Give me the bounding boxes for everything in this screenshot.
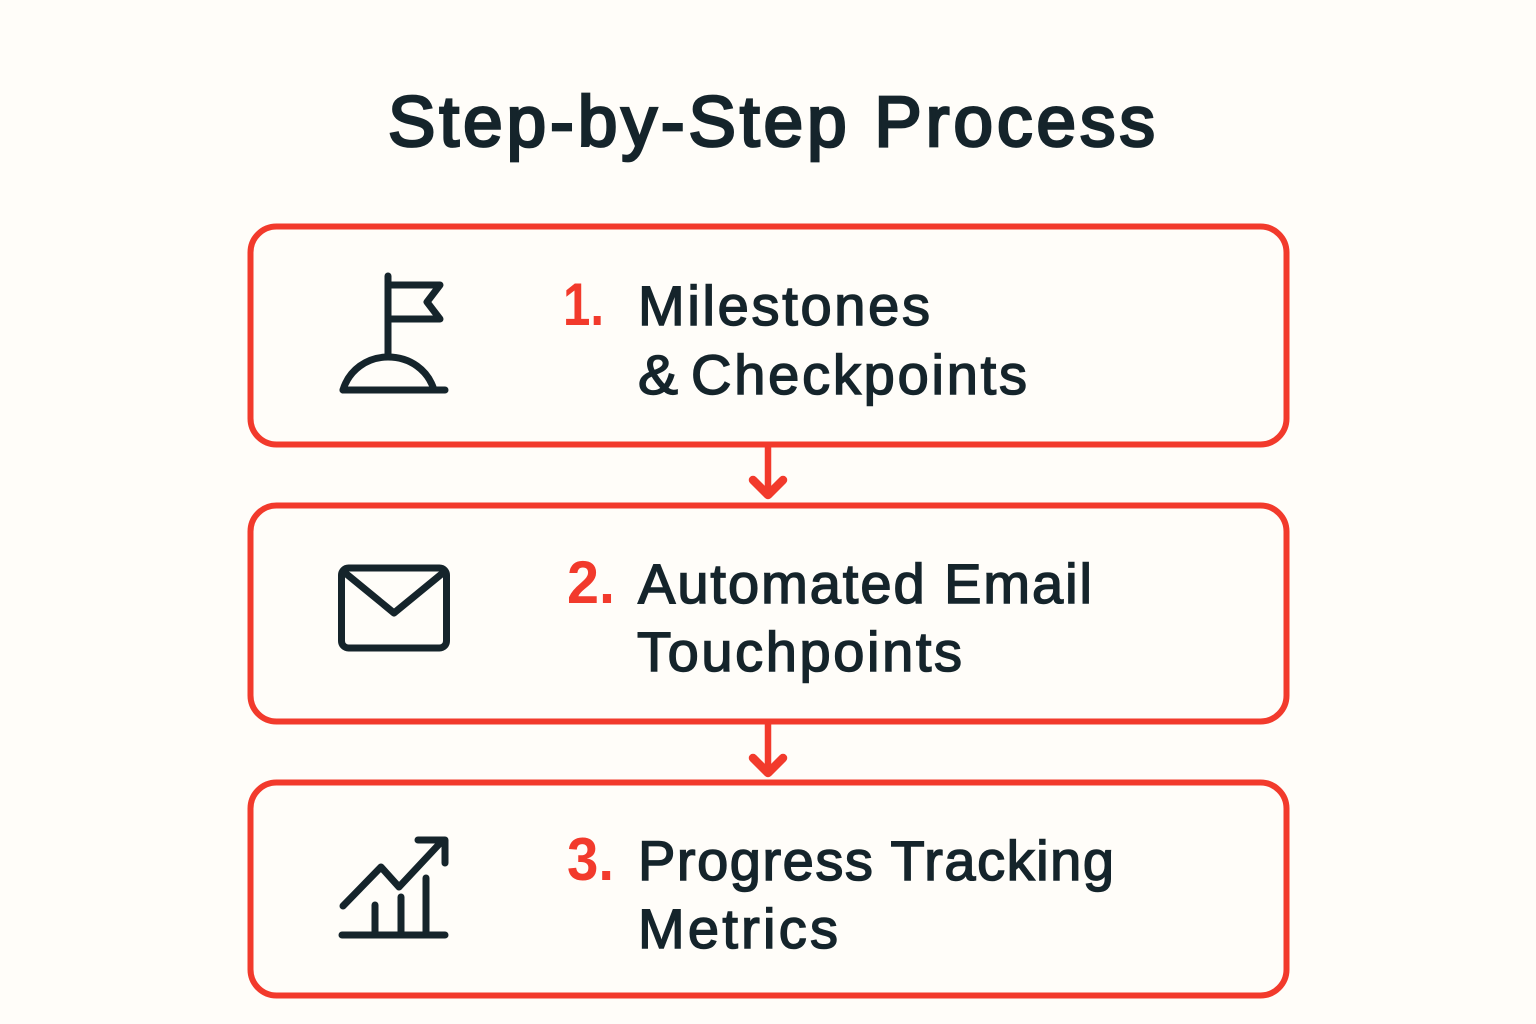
step 3 label: Metrics: [638, 897, 838, 960]
step 1 label: Checkpoints: [691, 343, 1027, 406]
panel: step 2: [250, 506, 1286, 722]
icon: growth chart: [342, 840, 445, 935]
step number 2: 2.: [567, 549, 615, 616]
step 2 label: Automated Email: [638, 552, 1092, 615]
step 1 label: Milestones: [638, 274, 930, 337]
step 1 label: &: [638, 343, 678, 406]
arrow: step 1 to 2: [753, 446, 783, 495]
step number 3: 3.: [567, 826, 614, 893]
panel: step 3: [250, 782, 1286, 996]
panel: step 1: [250, 226, 1286, 444]
icon: flag on mound: [343, 276, 445, 390]
icon: envelope: [342, 568, 446, 648]
arrow: step 2 to 3: [753, 723, 783, 773]
step 3 label: Progress Tracking: [638, 829, 1114, 892]
title: Step-by-Step Process: [388, 83, 1155, 162]
step number 1: 1.: [563, 271, 604, 338]
step 2 label: Touchpoints: [637, 620, 962, 683]
